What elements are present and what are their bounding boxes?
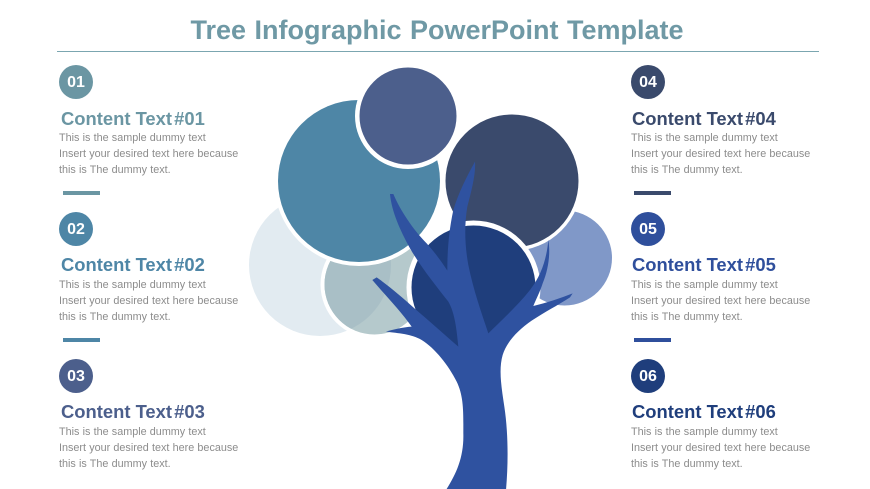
badge 05: 05 xyxy=(639,221,657,238)
heading 04: Content Text #04 xyxy=(632,108,776,129)
heading 02: Content Text #02 xyxy=(61,254,205,275)
heading 01: Content Text #01 xyxy=(61,108,205,129)
body text 02: Insert your desired text here because xyxy=(59,295,238,307)
body text 01: Insert your desired text here because xyxy=(59,148,238,160)
body text 03: Insert your desired text here because xyxy=(59,442,238,454)
body text 06: Insert your desired text here because xyxy=(631,442,810,454)
body text 02: This is the sample dummy text xyxy=(59,279,206,291)
accent bar 04 xyxy=(634,191,671,194)
body text 02: this is The dummy text. xyxy=(59,311,171,323)
circle: deep blue xyxy=(406,220,540,354)
panel: content 04 xyxy=(631,65,810,195)
chart: tree illustration xyxy=(249,68,612,489)
badge 01: 01 xyxy=(67,74,85,91)
body text 01 xyxy=(59,132,238,176)
body text 03 xyxy=(59,426,238,470)
body text 01: This is the sample dummy text xyxy=(59,132,206,144)
body text 03: this is The dummy text. xyxy=(59,458,171,470)
circle: dark navy xyxy=(442,111,582,251)
badge 06: 06 xyxy=(639,368,657,385)
badge 02: 02 xyxy=(67,221,85,238)
panel: content 06 xyxy=(631,359,810,470)
body text 06 xyxy=(631,426,810,470)
panel: content 02 xyxy=(59,212,238,342)
panel: content 05 xyxy=(631,212,810,342)
accent bar 05 xyxy=(634,338,671,342)
badge 03 xyxy=(59,359,93,393)
body text 02 xyxy=(59,279,238,323)
panel: content 03 xyxy=(59,359,238,470)
badge 04 xyxy=(631,65,665,99)
body text 05: This is the sample dummy text xyxy=(631,279,778,291)
accent bar 02 xyxy=(63,338,100,342)
circle: periwinkle xyxy=(517,210,612,306)
heading 06: Content Text #06 xyxy=(632,401,776,422)
heading 05: Content Text #05 xyxy=(632,254,776,275)
badge 05 xyxy=(631,212,665,246)
body text 04 xyxy=(631,132,810,176)
body text 06: this is The dummy text. xyxy=(631,458,743,470)
body text 04: this is The dummy text. xyxy=(631,164,743,176)
panel: content 01 xyxy=(59,65,238,195)
body text 03: This is the sample dummy text xyxy=(59,426,206,438)
circle: pale blue xyxy=(249,194,391,336)
circle: sage xyxy=(320,249,414,334)
body text 06: This is the sample dummy text xyxy=(631,426,778,438)
body text 04: Insert your desired text here because xyxy=(631,148,810,160)
badge 04: 04 xyxy=(639,74,657,91)
badge 02 xyxy=(59,212,93,246)
badge 06 xyxy=(631,359,665,393)
heading 03: Content Text #03 xyxy=(61,401,205,422)
title divider xyxy=(57,51,819,52)
circle: teal xyxy=(274,96,444,266)
body text 04: This is the sample dummy text xyxy=(631,132,778,144)
body text 05 xyxy=(631,279,810,323)
body text 05: Insert your desired text here because xyxy=(631,295,810,307)
badge 03: 03 xyxy=(67,368,85,385)
body text 05: this is The dummy text. xyxy=(631,311,743,323)
title: Tree Infographic PowerPoint Template xyxy=(190,15,684,45)
badge 01 xyxy=(59,65,93,99)
circle: slate top xyxy=(355,63,461,169)
accent bar 01 xyxy=(63,191,100,194)
icon: tree trunk and branches xyxy=(372,162,573,489)
body text 01: this is The dummy text. xyxy=(59,164,171,176)
